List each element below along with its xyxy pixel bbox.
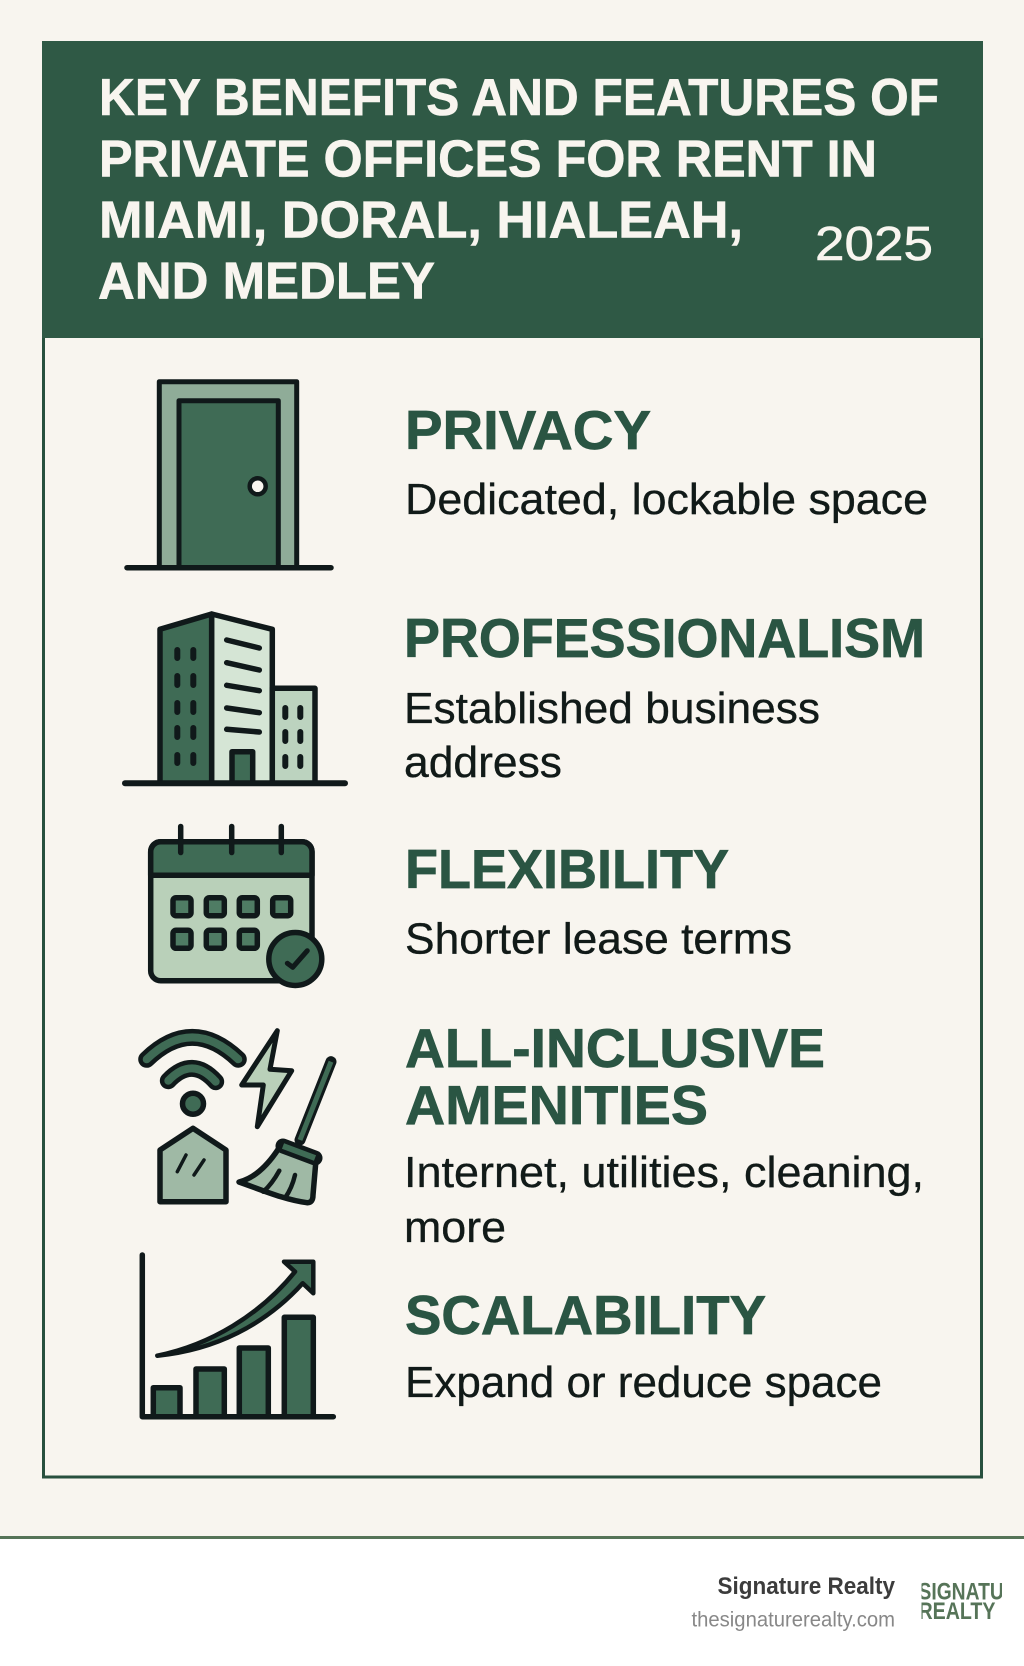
row: privacy xyxy=(127,382,928,568)
title: MIAMI, DORAL, HIALEAH, xyxy=(99,192,743,250)
row: all-inclusive amenities xyxy=(147,1017,924,1252)
description: amenities: more xyxy=(404,1203,506,1252)
heading: professionalism: PROFESSIONALISM xyxy=(404,607,925,669)
footer xyxy=(0,1536,1024,1666)
description: professionalism xyxy=(404,684,820,787)
footer logo: REALTY xyxy=(918,1598,996,1625)
description: scalability: Expand or reduce space xyxy=(405,1358,882,1407)
description: professionalism: address xyxy=(404,738,562,787)
icon: calendar with check xyxy=(151,826,322,986)
description: privacy: Dedicated, lockable space xyxy=(405,475,928,524)
title: PRIVATE OFFICES FOR RENT IN xyxy=(99,130,877,188)
footer logo xyxy=(922,1582,1002,1619)
panel: main frame xyxy=(44,42,982,1477)
title: AND MEDLEY xyxy=(98,252,435,310)
footer url: thesignaturerealty.com xyxy=(692,1608,895,1632)
icon: office buildings xyxy=(125,614,345,783)
heading: privacy: PRIVACY xyxy=(405,399,651,461)
description: amenities xyxy=(404,1148,924,1252)
heading: flexibility: FLEXIBILITY xyxy=(405,838,729,900)
heading: all-inclusive amenities: ALL-INCLUSIVE xyxy=(405,1017,825,1079)
row: flexibility xyxy=(151,826,792,986)
year: 2025 xyxy=(815,218,933,271)
description: amenities: Internet, utilities, cleaning, xyxy=(404,1148,924,1197)
heading: all-inclusive amenities: AMENITIES xyxy=(405,1074,708,1136)
row: professionalism xyxy=(125,607,925,787)
icon: wifi, power, cleaning xyxy=(147,1031,331,1203)
title: KEY BENEFITS AND FEATURES OF xyxy=(99,69,939,127)
footer brand name: Signature Realty xyxy=(718,1573,896,1600)
heading: all-inclusive amenities xyxy=(405,1017,825,1136)
row: scalability xyxy=(142,1255,882,1417)
title xyxy=(98,69,939,310)
heading: scalability: SCALABILITY xyxy=(405,1284,766,1346)
header banner xyxy=(42,41,983,338)
icon: door xyxy=(127,382,331,568)
description: flexibility: Shorter lease terms xyxy=(405,914,792,964)
description: professionalism: Established business xyxy=(404,684,820,733)
icon: growth chart xyxy=(142,1255,333,1417)
